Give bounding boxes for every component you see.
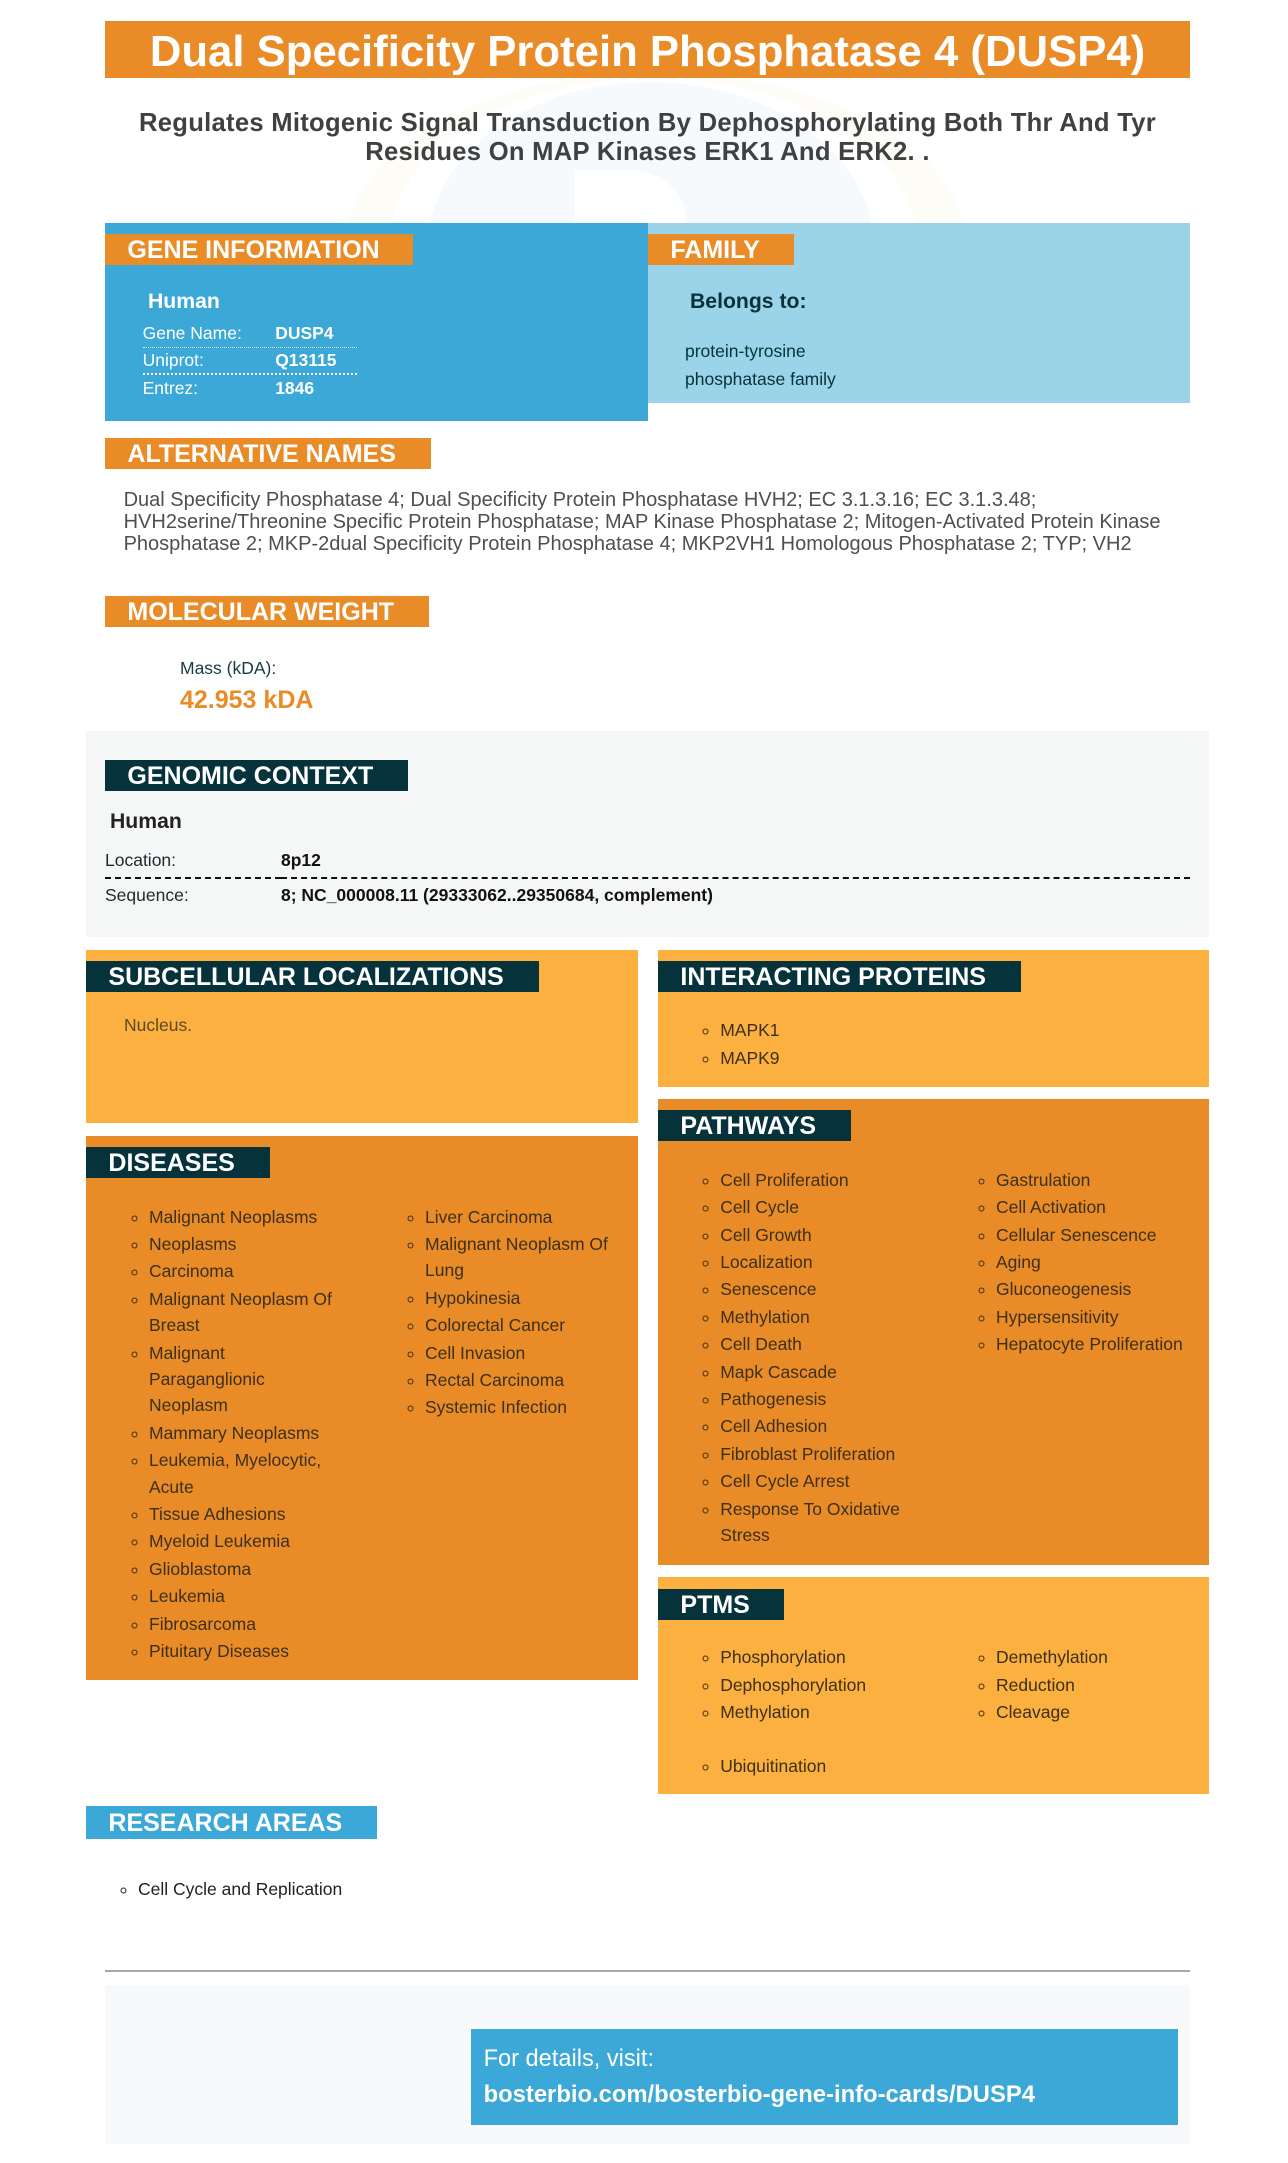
footer panel <box>105 1985 1190 2144</box>
diseases list column 1: Malignant <box>149 1343 225 1363</box>
pathways list column 1: Cell Cycle <box>720 1197 799 1217</box>
pathways list column 1: Pathogenesis <box>720 1389 826 1409</box>
genomic table: 8; NC_000008.11 (29333062..29350684, complement) <box>281 885 713 905</box>
diseases list column 1: Acute <box>149 1477 194 1497</box>
pathways list column 2: Hypersensitivity <box>996 1307 1119 1327</box>
gene info table: 1846 <box>275 378 314 398</box>
gene info table <box>143 323 357 398</box>
pathways list column 2: Hepatocyte Proliferation <box>996 1334 1183 1354</box>
diseases list column 2: Malignant Neoplasm Of <box>425 1234 608 1254</box>
section: molecular weight <box>105 596 429 714</box>
ptms list column 1: Dephosphorylation <box>720 1675 866 1695</box>
pathways list column 2: Cell Activation <box>996 1197 1106 1217</box>
diseases list column 1: Malignant Neoplasm Of <box>149 1289 332 1309</box>
interacting proteins list: MAPK9 <box>720 1048 780 1068</box>
diseases list column 1: Carcinoma <box>149 1261 234 1281</box>
diseases list column 2: Cell Invasion <box>425 1343 525 1363</box>
alternative names text: HVH2serine/Threonine Specific Protein Phosphatase; MAP Kinase Phosphatase 2; Mitogen-Activated Protein Kinase <box>124 511 1160 533</box>
diseases list column 1: Malignant Neoplasms <box>149 1207 317 1227</box>
heading: subcellular localizations: SUBCELLULAR LOCALIZATIONS <box>108 963 504 991</box>
panel: ptms <box>658 1577 1209 1794</box>
pathways list column 1: Response To Oxidative <box>720 1499 900 1519</box>
species label: Human <box>110 810 182 833</box>
panel: interacting proteins <box>658 950 1209 1087</box>
diseases list column 1: Leukemia <box>149 1586 225 1606</box>
mass value: 42.953 kDA <box>180 686 313 714</box>
heading: ptms: PTMS <box>680 1591 750 1619</box>
ptms list column 2 <box>978 1647 1108 1722</box>
panel: genomic context <box>86 731 1209 937</box>
diseases list column 1: Glioblastoma <box>149 1559 251 1579</box>
heading: research areas <box>86 1806 377 1839</box>
genomic table: 8p12 <box>281 850 321 870</box>
diseases list column 2: Rectal Carcinoma <box>425 1370 564 1390</box>
pathways list column 1: Senescence <box>720 1279 817 1299</box>
heading: pathways <box>658 1110 851 1141</box>
section: alternative names <box>105 438 1160 555</box>
pathways list column 1: Methylation <box>720 1307 810 1327</box>
family text: phosphatase family <box>685 369 836 389</box>
pathways list column 1: Cell Proliferation <box>720 1170 849 1190</box>
ptms list column 1: Methylation <box>720 1702 810 1722</box>
interacting proteins list <box>702 1020 780 1068</box>
family text: protein-tyrosine <box>685 341 806 361</box>
ptms list column 1: Phosphorylation <box>720 1647 846 1667</box>
diseases list column 1: Neoplasm <box>149 1395 228 1415</box>
subtitle: Residues On MAP Kinases ERK1 And ERK2. . <box>365 138 930 166</box>
heading: interacting proteins: INTERACTING PROTEINS <box>680 963 986 991</box>
gene info table: Q13115 <box>275 350 336 370</box>
heading: gene information: GENE INFORMATION <box>127 236 380 264</box>
pathways list column 1: Localization <box>720 1252 813 1272</box>
belongs to label: Belongs to: <box>690 290 807 313</box>
genomic table: Location: <box>105 850 176 870</box>
watermark logo <box>430 82 872 223</box>
heading: alternative names: ALTERNATIVE NAMES <box>127 440 396 468</box>
pathways list column 2: Gluconeogenesis <box>996 1279 1131 1299</box>
subtitle: Regulates Mitogenic Signal Transduction By Dephosphorylating Both Thr And Tyr <box>139 109 1156 137</box>
pathways list column 1 <box>702 1170 900 1545</box>
heading: molecular weight: MOLECULAR WEIGHT <box>127 598 394 626</box>
diseases list column 1: Neoplasms <box>149 1234 237 1254</box>
gene info table: Entrez: <box>143 378 198 398</box>
genomic table <box>105 850 1190 905</box>
heading: family <box>648 234 794 265</box>
diseases list column 1: Fibrosarcoma <box>149 1614 256 1634</box>
alternative names text: Dual Specificity Phosphatase 4; Dual Specificity Protein Phosphatase HVH2; EC 3.1.3.16; EC 3.1.3.48; <box>124 489 1036 511</box>
panel: gene information <box>105 223 648 421</box>
pathways list column 1: Mapk Cascade <box>720 1362 837 1382</box>
pathways list column 2: Cellular Senescence <box>996 1225 1157 1245</box>
pathways list column 1: Fibroblast Proliferation <box>720 1444 895 1464</box>
diseases list column 1: Tissue Adhesions <box>149 1504 286 1524</box>
panel: diseases <box>86 1136 638 1680</box>
pathways list column 2: Gastrulation <box>996 1170 1090 1190</box>
heading: research areas: RESEARCH AREAS <box>108 1809 342 1837</box>
diseases list column 1: Pituitary Diseases <box>149 1641 289 1661</box>
pathways list column 2: Aging <box>996 1252 1041 1272</box>
localization text: Nucleus. <box>124 1015 192 1035</box>
pathways list column 1: Stress <box>720 1525 770 1545</box>
panel: subcellular localizations <box>86 950 638 1123</box>
title: Dual Specificity Protein Phosphatase 4 (DUSP4) <box>150 27 1145 76</box>
diseases list column 2 <box>408 1207 608 1417</box>
diseases list column 2: Hypokinesia <box>425 1288 520 1308</box>
ptms list column 1: Ubiquitination <box>720 1756 826 1776</box>
section: research areas <box>86 1806 377 1899</box>
interacting proteins list: MAPK1 <box>720 1020 780 1040</box>
research areas list: Cell Cycle and Replication <box>138 1879 342 1899</box>
pathways list column 1: Cell Adhesion <box>720 1416 827 1436</box>
panel: family <box>648 223 1190 403</box>
panel: pathways <box>658 1099 1209 1565</box>
pathways list column 1: Cell Cycle Arrest <box>720 1471 850 1491</box>
diseases list column 1 <box>132 1207 332 1661</box>
pathways list column 1: Cell Death <box>720 1334 802 1354</box>
subtitle <box>139 109 1156 166</box>
heading: family: FAMILY <box>670 236 760 264</box>
gene info table: Uniprot: <box>143 350 204 370</box>
heading: genomic context: GENOMIC CONTEXT <box>127 762 373 790</box>
genomic table: Sequence: <box>105 885 189 905</box>
diseases list column 1: Myeloid Leukemia <box>149 1531 290 1551</box>
heading: pathways: PATHWAYS <box>680 1112 816 1140</box>
species label: Human <box>148 290 220 313</box>
diseases list column 1: Breast <box>149 1315 200 1335</box>
diseases list column 2: Colorectal Cancer <box>425 1315 565 1335</box>
alternative names text: Phosphatase 2; MKP-2dual Specificity Protein Phosphatase 4; MKP2VH1 Homologous Phosphatase 2; TYP; VH2 <box>124 533 1132 555</box>
ptms list column 2: Cleavage <box>996 1702 1070 1722</box>
diseases list column 1: Mammary Neoplasms <box>149 1423 319 1443</box>
diseases list column 2: Liver Carcinoma <box>425 1207 552 1227</box>
callout: details link <box>471 2029 1178 2125</box>
gene info table: DUSP4 <box>275 323 334 343</box>
heading: ptms <box>658 1589 784 1620</box>
details label: For details, visit: <box>484 2046 654 2072</box>
gene info table: Gene Name: <box>143 323 242 343</box>
pathways list column 2 <box>978 1170 1183 1354</box>
heading: diseases <box>86 1147 270 1178</box>
pathways list column 1: Cell Growth <box>720 1225 812 1245</box>
diseases list column 2: Lung <box>425 1260 464 1280</box>
mass label: Mass (kDA): <box>180 658 276 678</box>
details url: bosterbio.com/bosterbio-gene-info-cards/DUSP4 <box>484 2081 1035 2108</box>
ptms list column 2: Demethylation <box>996 1647 1108 1667</box>
ptms list column 1 <box>702 1647 866 1776</box>
heading: diseases: DISEASES <box>108 1149 235 1177</box>
family text <box>685 341 836 389</box>
diseases list column 1: Leukemia, Myelocytic, <box>149 1450 321 1470</box>
alternative names text <box>124 489 1160 555</box>
diseases list column 2: Systemic Infection <box>425 1397 567 1417</box>
diseases list column 1: Paraganglionic <box>149 1369 265 1389</box>
ptms list column 2: Reduction <box>996 1675 1075 1695</box>
